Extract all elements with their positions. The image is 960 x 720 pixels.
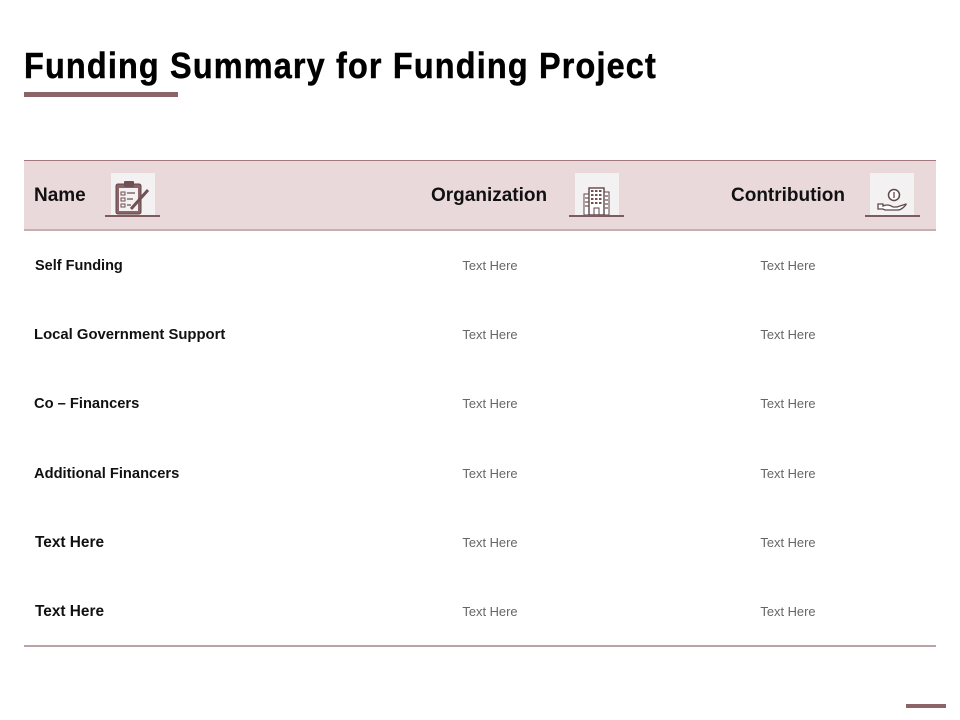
row: Text Here 1: Text Here [462, 535, 518, 550]
row: Local Government Support [34, 327, 816, 343]
title: Funding Summary for Funding Project [24, 46, 657, 86]
row: Self Funding: Self Funding [35, 258, 123, 274]
table header band [24, 160, 936, 231]
icon: clipboard checklist [105, 173, 160, 217]
row: Text Here 2: Text Here [462, 604, 518, 619]
header: Contribution: Contribution [731, 185, 845, 206]
row: Text Here 1 [35, 534, 816, 551]
header: Name: Name [34, 185, 86, 206]
row: Local Government Support: Local Government Support [34, 327, 225, 343]
row: Self Funding: Text Here [760, 258, 816, 273]
row: Additional Financers [34, 466, 816, 482]
row: Text Here 2: Text Here [760, 604, 816, 619]
icon: hand holding coin [865, 173, 920, 217]
row: Local Government Support: Text Here [760, 327, 816, 342]
row: Self Funding: Text Here [462, 258, 518, 273]
header: Organization: Organization [431, 185, 547, 206]
row: Text Here 1: Text Here [760, 535, 816, 550]
row: Self Funding [35, 258, 816, 274]
title underline [24, 92, 178, 97]
row: Co – Financers [34, 396, 816, 412]
table bottom rule [24, 645, 936, 647]
row: Additional Financers: Additional Financers [34, 466, 179, 482]
row: Additional Financers: Text Here [760, 466, 816, 481]
page marker [906, 704, 946, 708]
row: Co – Financers: Text Here [462, 396, 518, 411]
icon: office building [569, 173, 624, 217]
row: Additional Financers: Text Here [462, 466, 518, 481]
row: Co – Financers: Text Here [760, 396, 816, 411]
row: Text Here 1: Text Here [35, 534, 104, 551]
row: Text Here 2 [35, 603, 816, 620]
row: Co – Financers: Co – Financers [34, 396, 139, 412]
row: Text Here 2: Text Here [35, 603, 104, 620]
row: Local Government Support: Text Here [462, 327, 518, 342]
